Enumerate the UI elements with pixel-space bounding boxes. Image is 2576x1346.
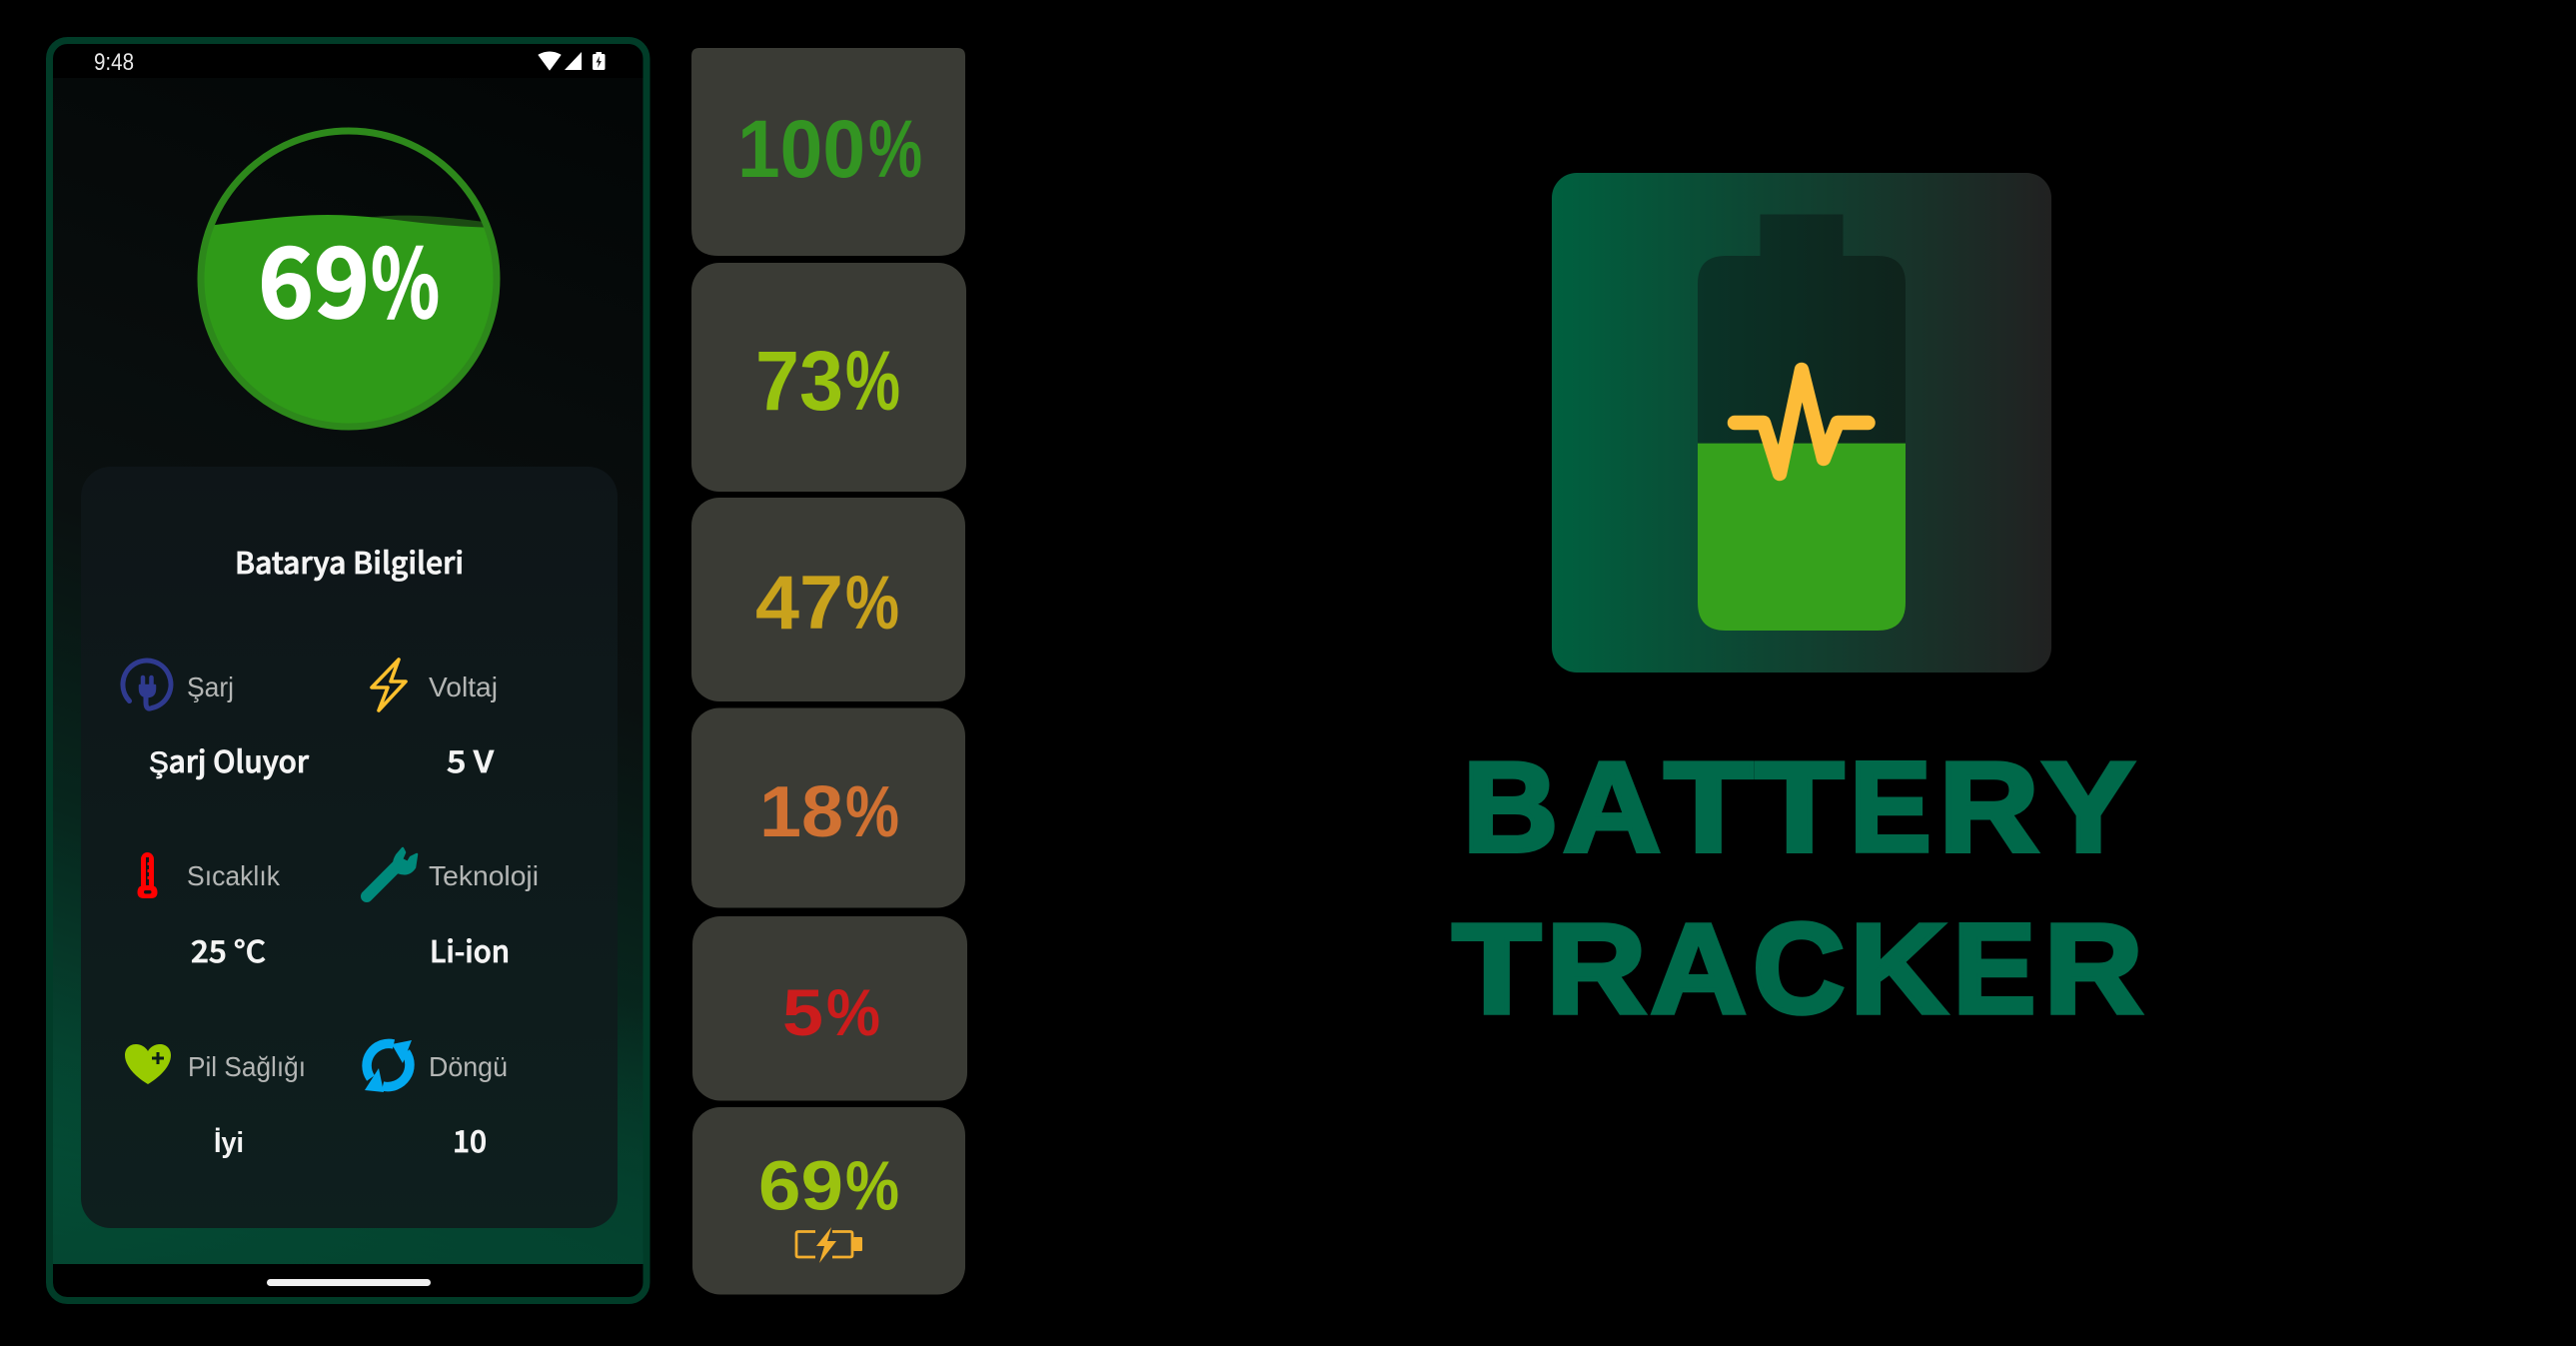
icon: cell signal bbox=[565, 52, 582, 70]
title: BATTERY TRACKER bbox=[1452, 736, 2143, 1041]
card: 47%: 47 bbox=[755, 561, 843, 646]
item: charge state bbox=[123, 661, 310, 781]
title: BATTERY TRACKER: R bbox=[1546, 897, 1647, 1041]
icon: heart bbox=[125, 1044, 171, 1084]
item: battery health: İyi bbox=[214, 1127, 244, 1159]
title: BATTERY TRACKER: T bbox=[1452, 897, 1541, 1041]
title: BATTERY TRACKER: E bbox=[1850, 736, 1932, 879]
item: technology: Li-ion bbox=[430, 927, 510, 971]
icon: thermometer bbox=[138, 852, 158, 898]
item: voltage: 5 V bbox=[447, 737, 494, 781]
card: 18%: 18 bbox=[759, 772, 843, 852]
item: cycle count: Döngü bbox=[429, 1051, 508, 1082]
icon: wifi bbox=[539, 52, 561, 70]
battery charge fill bbox=[1698, 444, 1906, 631]
panel: phone screenshot bbox=[50, 40, 646, 1301]
battery level gauge bbox=[190, 131, 510, 440]
item: cycle count: 10 bbox=[453, 1117, 487, 1161]
card: 69% charging: % bbox=[845, 1147, 899, 1225]
title: BATTERY TRACKER: C bbox=[1753, 897, 1845, 1041]
icon: plug bbox=[123, 661, 171, 708]
title: BATTERY TRACKER: A bbox=[1563, 736, 1661, 879]
title: BATTERY TRACKER: B bbox=[1463, 736, 1558, 879]
title: BATTERY TRACKER: Y bbox=[2042, 736, 2134, 879]
icon: status battery charging bbox=[593, 52, 606, 70]
icon: lightning bolt bbox=[372, 660, 406, 710]
status time: 9:48 bbox=[94, 49, 134, 76]
panel: widget swatches bbox=[691, 48, 967, 1295]
card: 5%: % bbox=[826, 975, 880, 1049]
card: 73%: % bbox=[845, 334, 900, 428]
gauge percentage: 69 bbox=[258, 210, 370, 346]
card: 18%: % bbox=[845, 772, 899, 852]
title: BATTERY TRACKER: T bbox=[1755, 736, 1844, 879]
item: charge state: Şarj bbox=[187, 672, 234, 702]
phone frame bbox=[50, 40, 646, 1301]
item: battery health bbox=[125, 1044, 306, 1159]
card: 73% bbox=[691, 263, 966, 492]
card: 100%: 100 bbox=[737, 104, 865, 195]
item: voltage: Voltaj bbox=[429, 672, 498, 702]
card: 18% bbox=[691, 707, 965, 907]
gauge percentage: % bbox=[371, 210, 440, 346]
navigation bar bbox=[53, 1264, 644, 1297]
card: 47%: % bbox=[845, 561, 899, 646]
phone screen background bbox=[50, 40, 646, 1301]
item: temperature: 25 °C bbox=[191, 927, 266, 971]
item: charge state: Şarj Oluyor bbox=[149, 737, 310, 781]
item: cycle count bbox=[365, 1040, 508, 1161]
battery empty body bbox=[1698, 214, 1906, 631]
item: voltage bbox=[372, 660, 498, 781]
title: BATTERY TRACKER: T bbox=[1664, 736, 1753, 879]
item: battery health: Pil Sağlığı bbox=[188, 1051, 306, 1082]
pulse line bbox=[1735, 370, 1869, 474]
card: 100% bbox=[691, 48, 965, 256]
logo background bbox=[1552, 173, 2051, 673]
item: technology: Teknoloji bbox=[429, 860, 539, 891]
title: BATTERY TRACKER: E bbox=[1952, 897, 2036, 1041]
card: 100%: % bbox=[868, 104, 922, 195]
panel: battery information bbox=[81, 467, 618, 1228]
card: 69% charging: 69 bbox=[758, 1147, 843, 1225]
title: BATTERY TRACKER: R bbox=[2044, 897, 2143, 1041]
item: temperature bbox=[138, 852, 281, 971]
liquid fill bbox=[204, 215, 494, 424]
icon: sync arrows bbox=[365, 1040, 412, 1092]
app logo bbox=[1552, 173, 2051, 673]
back wave bbox=[370, 216, 484, 228]
status bar bbox=[53, 44, 644, 78]
title: BATTERY TRACKER: R bbox=[1938, 736, 2039, 879]
card: 69% charging bbox=[692, 1107, 965, 1295]
card: 5%: 5 bbox=[782, 975, 823, 1049]
title: BATTERY TRACKER: K bbox=[1850, 897, 1946, 1041]
gauge ring bbox=[201, 131, 497, 427]
card: 73%: 73 bbox=[755, 334, 843, 428]
icon: charging battery bbox=[796, 1227, 862, 1263]
card: 5% bbox=[692, 916, 967, 1101]
item: technology bbox=[367, 848, 539, 971]
item: temperature: Sıcaklık bbox=[187, 860, 281, 891]
panel heading: Batarya Bilgileri bbox=[235, 539, 464, 583]
home indicator bbox=[267, 1279, 431, 1286]
icon: wrench bbox=[367, 848, 417, 896]
title: BATTERY TRACKER: A bbox=[1651, 897, 1747, 1041]
card: 47% bbox=[691, 498, 965, 701]
infographic: battery tracker promo bbox=[46, 37, 2144, 1304]
